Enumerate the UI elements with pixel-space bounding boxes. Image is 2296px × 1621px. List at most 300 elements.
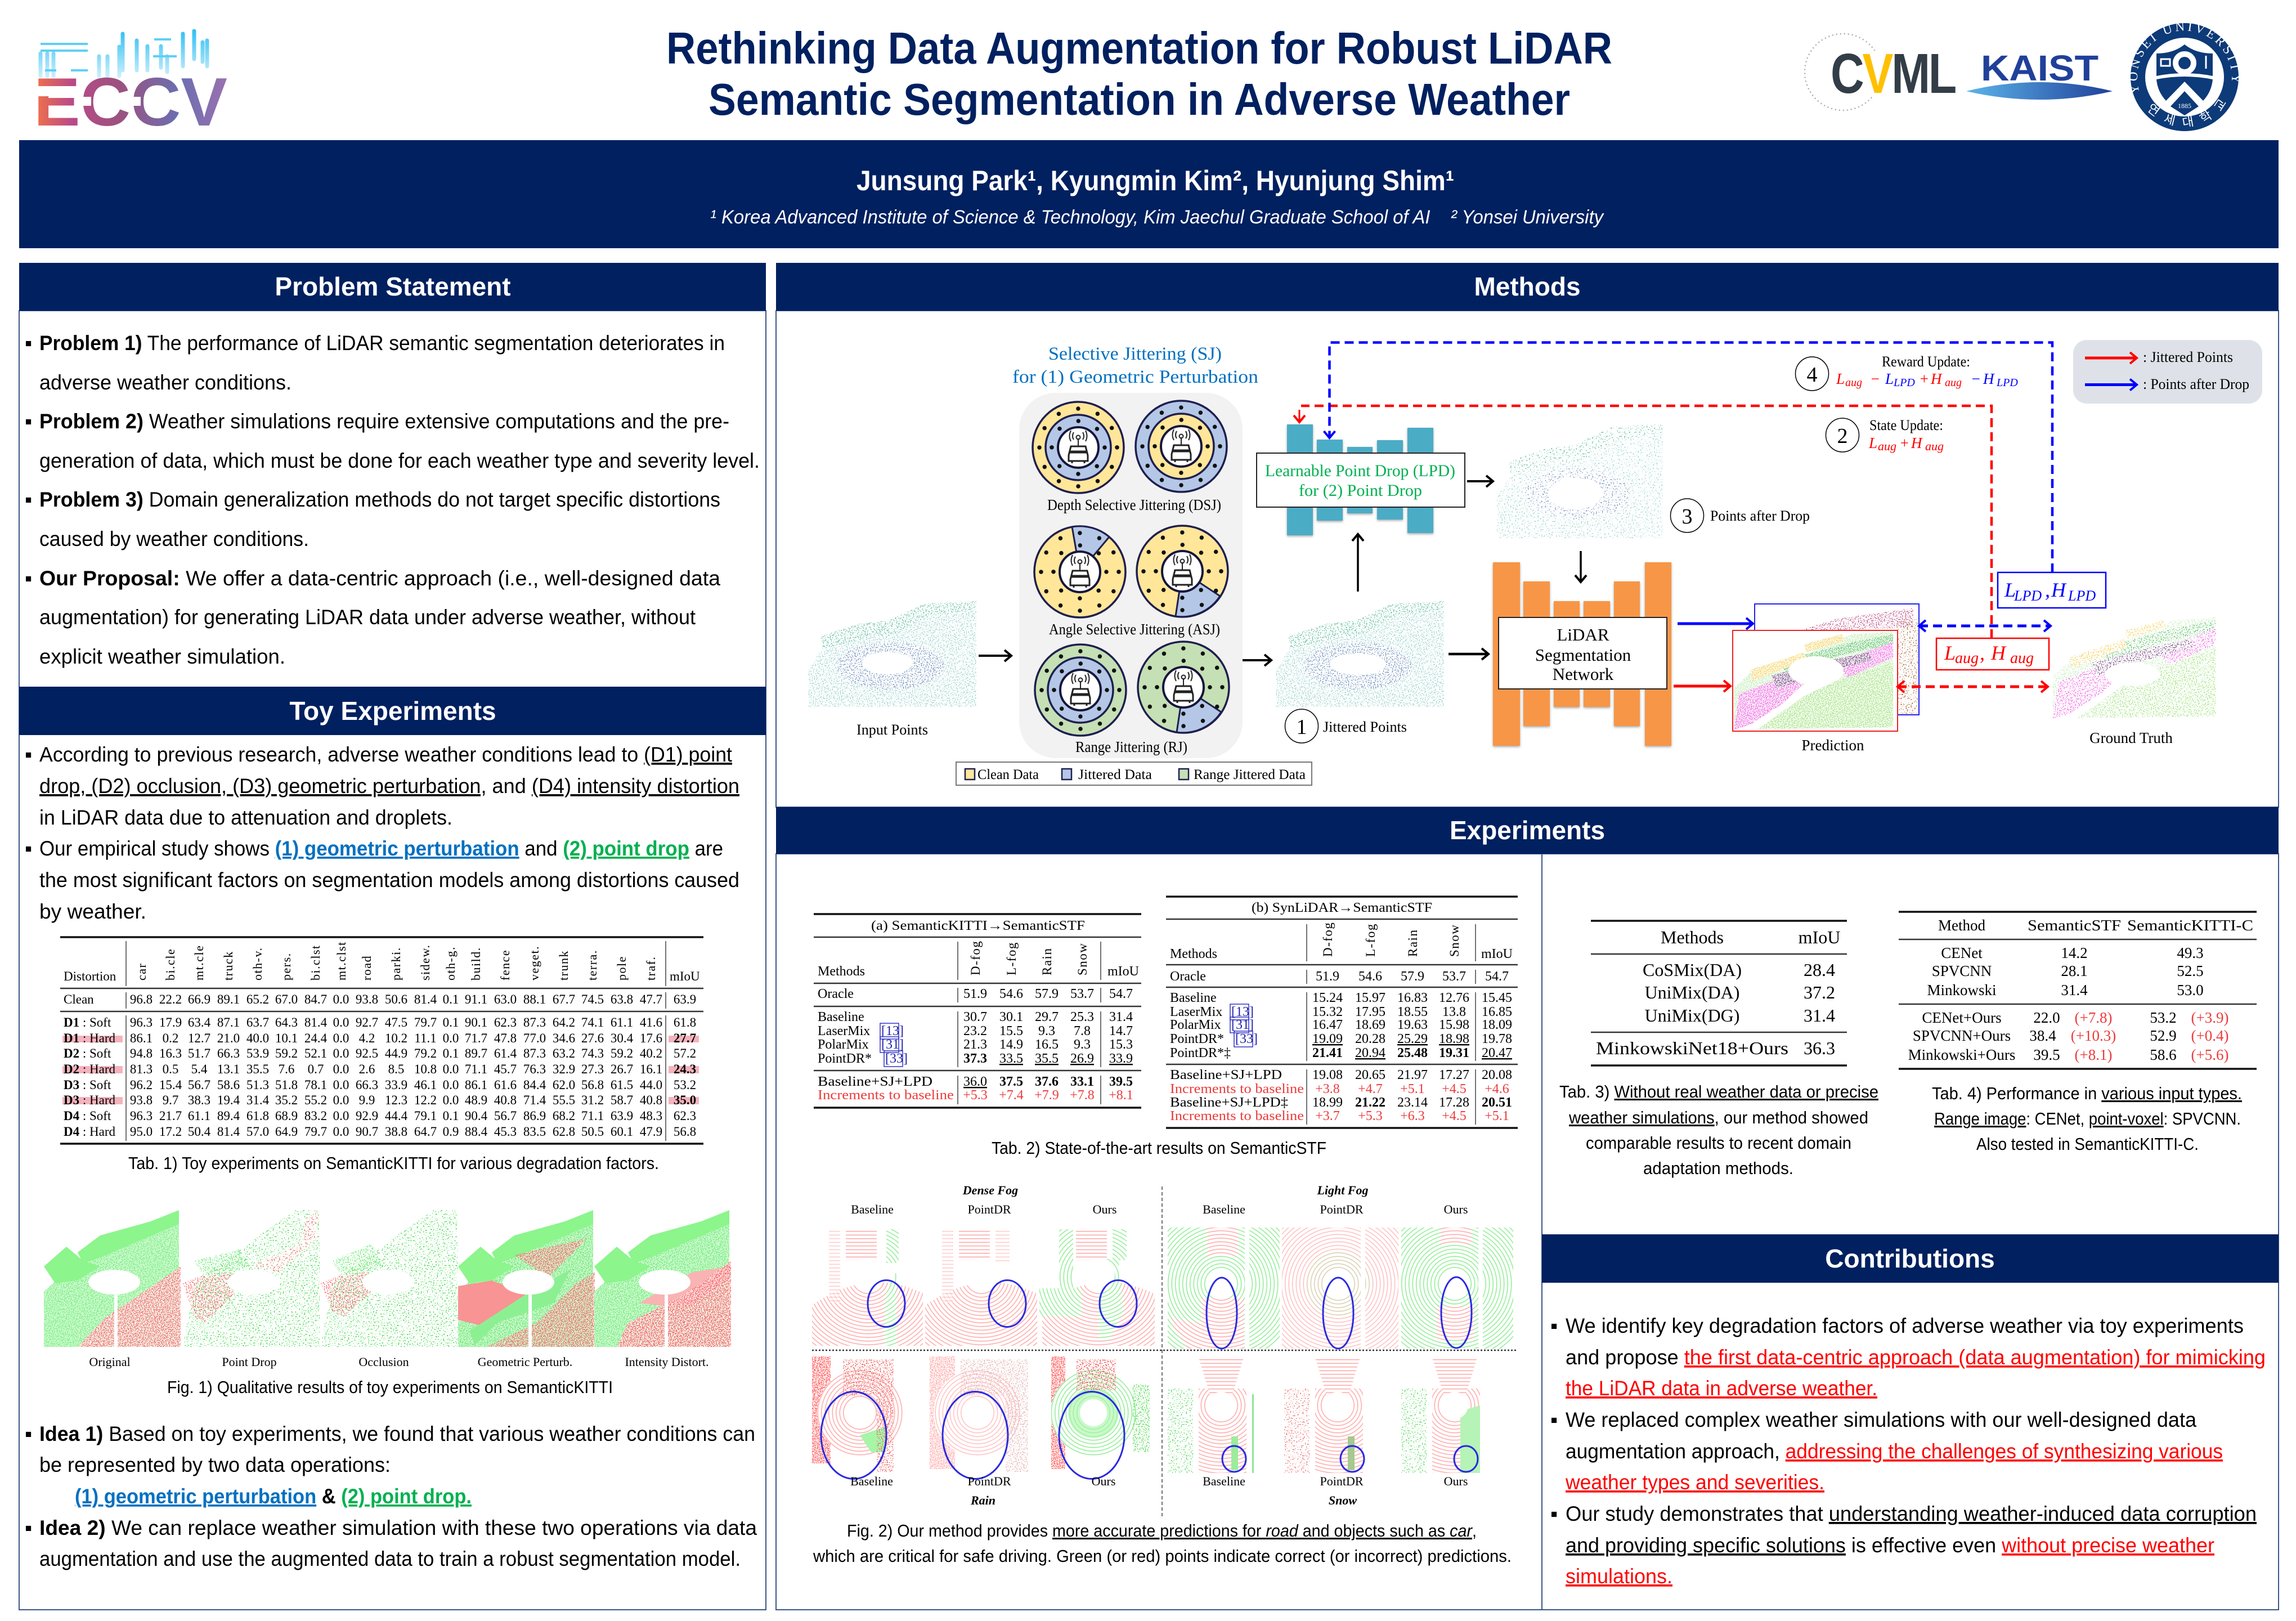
table 1: toy experiments: 96.8	[130, 992, 153, 1006]
labels: top row: Ours	[1444, 1202, 1468, 1216]
table 2b: SynLiDAR to SemanticSTF: Increments to baseline	[1170, 1109, 1304, 1123]
heading: Experiments: Experiments	[1450, 816, 1605, 845]
table 2b: SynLiDAR to SemanticSTF: Baseline+SJ+LPD‡	[1170, 1095, 1288, 1110]
labels: top row: Baseline	[851, 1202, 894, 1216]
author band	[19, 140, 2279, 248]
text block: contributions: and providing specific solutions is effective even without precise weather	[1566, 1534, 2214, 1557]
image: light fog baseline	[1168, 1228, 1280, 1349]
heading: Toy Experiments: Toy Experiments	[289, 696, 496, 726]
table 1: toy experiments: Clean	[64, 992, 94, 1006]
table 2a: SemanticKITTI to SemanticSTF: +8.1	[1109, 1088, 1133, 1103]
table 2a: SemanticKITTI to SemanticSTF: Oracle	[818, 987, 854, 1001]
image labels: Point Drop	[222, 1355, 277, 1369]
block: LiDAR segmentation network	[1493, 562, 1671, 746]
text block: problems: Problem 1) The performance of LiDAR semantic segmentation deteriorates in	[39, 332, 725, 355]
image: ground truth	[2053, 617, 2216, 746]
annotation: state update: aug	[1878, 439, 1896, 453]
annotation: reward update: aug	[1945, 377, 1962, 389]
caption: table 1: Tab. 1) Toy experiments on SemanticKITTI for various degradation factors.	[128, 1153, 659, 1173]
table 1: toy experiments: 0.0	[443, 1031, 459, 1045]
text: selective jittering title: for (1) Geometric Perturbation	[1012, 367, 1258, 387]
table 2a: SemanticKITTI to SemanticSTF: 25.3	[1070, 1010, 1094, 1024]
table 1: toy experiments: 58.7	[611, 1093, 633, 1107]
table 2b: SynLiDAR to SemanticSTF: 19.09	[1312, 1032, 1343, 1046]
block: learnable point drop: for (2) Point Drop	[1299, 481, 1422, 500]
image: jittered points: 1	[1297, 715, 1307, 739]
table 4: input types: Method	[1938, 917, 1985, 934]
table 2a: SemanticKITTI to SemanticSTF: +5.3	[963, 1088, 988, 1103]
image: rain baseline	[812, 1356, 903, 1472]
table 1: toy experiments: 9.7	[163, 1093, 178, 1107]
table 2b: SynLiDAR to SemanticSTF: PointDR*	[1170, 1032, 1224, 1046]
logo: KAIST: KAIST	[1981, 48, 2098, 88]
figure 2: qualitative comparison	[812, 1183, 1536, 1517]
image: light fog ours	[1401, 1228, 1513, 1349]
table 1: toy experiments: 27.6	[581, 1031, 604, 1045]
image: dense fog ours	[1039, 1229, 1155, 1346]
table 2b: SynLiDAR to SemanticSTF: 18.09	[1482, 1018, 1512, 1032]
table 1: toy experiments: 84.4	[523, 1078, 546, 1092]
table 1: toy experiments: 63.9	[674, 992, 696, 1006]
table 1: toy experiments: 89.1	[217, 992, 240, 1006]
annotation: state update	[1826, 417, 1944, 453]
table 1: toy experiments: 0.0	[333, 1109, 349, 1123]
table 4: input types: CENet+Ours	[1922, 1009, 2002, 1026]
table 1: toy experiments: 56.8	[581, 1078, 604, 1092]
table 3: domain adaptation comparison: UniMix(DG)	[1645, 1005, 1739, 1026]
table 1: toy experiments: 0.0	[333, 1093, 349, 1107]
table 1: toy experiments: 0.0	[333, 992, 349, 1006]
labels: top row	[851, 1183, 1468, 1216]
caption: table 4: Also tested in SemanticKITTI-C.	[1976, 1134, 2199, 1154]
table 1: toy experiments: 0.1	[443, 1046, 459, 1060]
label: ASJ: Angle Selective Jittering (ASJ)	[1049, 621, 1220, 638]
table 2a: SemanticKITTI to SemanticSTF: L-fog	[1004, 942, 1019, 975]
table 1: toy experiments: 57.0	[246, 1125, 269, 1139]
image: intensity distortion	[594, 1210, 731, 1347]
caption: table 4: Range image: CENet, point-voxel: SPVCNN.	[1934, 1109, 2241, 1129]
table 1: toy experiments: 63.8	[611, 992, 633, 1006]
table 1: toy experiments: 87.3	[523, 1046, 546, 1060]
image: snow PointDR	[1284, 1359, 1363, 1473]
text block: problems: explicit weather simulation.	[39, 645, 285, 668]
table 2a: SemanticKITTI to SemanticSTF: Baseline	[818, 1010, 864, 1024]
image: prediction	[1733, 604, 1919, 754]
table 1: toy experiments: trunk	[557, 950, 571, 980]
table 1: toy experiments: 81.4	[217, 1125, 240, 1139]
table 3: domain adaptation comparison: 28.4	[1804, 960, 1835, 980]
arrow: dashed red state update	[1301, 406, 1992, 638]
table 4: input types: 58.6	[2150, 1046, 2177, 1063]
labels: top row: Baseline	[1203, 1202, 1245, 1216]
table 4: input types: 53.2	[2150, 1009, 2177, 1026]
table 1: toy experiments: 24.3	[674, 1062, 696, 1076]
text block: ideas: ▪	[25, 1516, 32, 1539]
table 1: toy experiments: 34.6	[553, 1031, 575, 1045]
text block: problems: caused by weather conditions.	[39, 527, 309, 550]
table 1: toy experiments: 44.0	[640, 1078, 662, 1092]
table 1: toy experiments: 81.4	[304, 1015, 328, 1029]
annotation: state update: +	[1899, 435, 1909, 451]
table 2a: SemanticKITTI to SemanticSTF: 39.5	[1109, 1074, 1133, 1089]
arrow: network to red prediction	[1674, 684, 1730, 688]
table 2b: SynLiDAR to SemanticSTF: L-fog	[1364, 923, 1378, 957]
caption: table 3: comparable results to recent domain	[1586, 1133, 1851, 1153]
text block: contributions: We identify key degradation factors of adverse weather via toy experiments	[1566, 1314, 2244, 1337]
caption: table 4: Tab. 4) Performance in various input types.	[1932, 1083, 2242, 1103]
table 1: toy experiments: 17.2	[159, 1125, 182, 1139]
annotation: reward update: Reward Update:	[1882, 353, 1970, 370]
table 1: toy experiments: 31.2	[581, 1093, 604, 1107]
table 1: toy experiments: 68.2	[553, 1109, 575, 1123]
table 2a: SemanticKITTI to SemanticSTF: Rain	[1040, 948, 1054, 975]
logo: CVML	[1805, 34, 1958, 110]
table 1: toy experiments: 53.9	[246, 1046, 269, 1060]
table 2b: SynLiDAR to SemanticSTF: D-fog	[1321, 922, 1335, 957]
table 2b: SynLiDAR to SemanticSTF: Baseline+SJ+LPD	[1170, 1068, 1282, 1082]
table 4: input types: 52.9	[2150, 1027, 2177, 1044]
panel: selective jittering	[1019, 393, 1243, 758]
text block: problems: Problem 3) Domain generalization methods do not target specific distortions	[39, 488, 720, 511]
image: points after drop: Points after Drop	[1710, 508, 1810, 524]
box: augmentation loss: L	[1944, 642, 1956, 664]
table 1: toy experiments: 2.6	[359, 1062, 375, 1076]
table 1: toy experiments: 71.4	[523, 1093, 546, 1107]
table 1: toy experiments: 50.5	[581, 1125, 604, 1139]
table 1: toy experiments: terra.	[585, 950, 599, 980]
logo: Yonsei University	[2131, 23, 2239, 131]
labels: top row: Dense Fog	[962, 1183, 1018, 1197]
table 4: input types: SPVCNN	[1932, 962, 1992, 979]
heading: Experiments	[776, 807, 2279, 854]
annotation: reward update	[1795, 353, 2018, 391]
table 1: toy experiments: 81.4	[414, 992, 437, 1006]
table 1: toy experiments: 21.0	[217, 1031, 240, 1045]
table 1: toy experiments: 93.8	[130, 1093, 153, 1107]
table 4: input types: CENet	[1941, 944, 1983, 961]
table 1: toy experiments: 53.2	[674, 1078, 696, 1092]
table 1: toy experiments: 7.6	[279, 1062, 294, 1076]
caption: table 3	[1559, 1082, 1878, 1178]
annotation: state update: H	[1911, 435, 1923, 451]
table 1: toy experiments: build.	[469, 947, 483, 980]
annotation: reward update: 4	[1806, 363, 1818, 387]
table 2b: SynLiDAR to SemanticSTF: +6.3	[1400, 1109, 1425, 1123]
title: Semantic Segmentation in Adverse Weather	[708, 74, 1570, 124]
table 1: toy experiments: 0.1	[443, 1109, 459, 1123]
table 2b: SynLiDAR to SemanticSTF: 18.98	[1439, 1032, 1469, 1046]
table 1: toy experiments: 48.9	[465, 1093, 487, 1107]
table 1: toy experiments: 40.8	[640, 1093, 662, 1107]
table 1: toy experiments: 63.0	[494, 992, 517, 1006]
caption: table 3: Tab. 3) Without real weather data or precise	[1559, 1082, 1878, 1101]
table 2b: SynLiDAR to SemanticSTF: 12.76	[1439, 991, 1469, 1005]
labels: top row: Ours	[1093, 1202, 1116, 1216]
table 4: input types: (+5.6)	[2191, 1046, 2228, 1063]
table 1: toy experiments: 61.4	[494, 1046, 517, 1060]
block: LiDAR segmentation network: Network	[1553, 664, 1614, 684]
labels: bottom row: Baseline	[850, 1474, 893, 1488]
table 1: toy experiments: 56.8	[674, 1125, 696, 1139]
image: prediction: Prediction	[1802, 737, 1864, 754]
table 2b: SynLiDAR to SemanticSTF: +5.3	[1358, 1109, 1383, 1123]
table 2a: SemanticKITTI to SemanticSTF: 23.2	[963, 1024, 987, 1038]
table 1: toy experiments: 47.7	[640, 992, 662, 1006]
table 2b: SynLiDAR to SemanticSTF: 20.28	[1355, 1032, 1385, 1046]
affiliations: ¹ Korea Advanced Institute of Science & Technology, Kim Jaechul Graduate School of AI ² Yonsei University	[710, 207, 1604, 228]
table 2a: SemanticKITTI to SemanticSTF: 57.9	[1035, 987, 1059, 1001]
table 1: toy experiments: mt.clst	[334, 941, 348, 980]
table 1: toy experiments: 0.1	[443, 1015, 459, 1029]
table 2a: SemanticKITTI to SemanticSTF: (a) SemanticKITTI→SemanticSTF	[871, 919, 1085, 933]
table 1: toy experiments: 60.1	[611, 1125, 633, 1139]
table 2a: SemanticKITTI to SemanticSTF: 54.6	[999, 987, 1023, 1001]
table 2a: SemanticKITTI to SemanticSTF: 31.4	[1109, 1010, 1133, 1024]
table 1: toy experiments: 0.9	[443, 1125, 459, 1139]
legend: data types: Clean Data	[977, 767, 1039, 782]
text block: contributions: ▪	[1550, 1408, 1558, 1431]
table 2a: SemanticKITTI to SemanticSTF: 54.7	[1109, 987, 1133, 1001]
table 1: toy experiments: D3 : Soft	[64, 1078, 111, 1092]
table 2b: SynLiDAR to SemanticSTF: mIoU	[1481, 947, 1513, 961]
table 1: toy experiments: 66.3	[356, 1078, 378, 1092]
table 2a: SemanticKITTI to SemanticSTF: 29.7	[1035, 1010, 1059, 1024]
table 2a: SemanticKITTI to SemanticSTF: 33.9	[1109, 1051, 1133, 1066]
table 2b: SynLiDAR to SemanticSTF: 25.29	[1397, 1032, 1428, 1046]
table 1: toy experiments: 47.9	[640, 1125, 662, 1139]
image: snow ours	[1401, 1359, 1480, 1473]
table 1: toy experiments: 17.6	[640, 1031, 662, 1045]
table 2a: SemanticKITTI to SemanticSTF: 30.7	[963, 1010, 987, 1024]
table 2b: SynLiDAR to SemanticSTF: Baseline	[1170, 991, 1217, 1005]
table 2b: SynLiDAR to SemanticSTF: 19.08	[1312, 1068, 1343, 1082]
table 1: toy experiments: 76.3	[523, 1062, 546, 1076]
highlight ellipses	[821, 1277, 1478, 1479]
table 1: toy experiments: 12.7	[188, 1031, 210, 1045]
text block: toy experiments: ▪	[25, 837, 32, 860]
table 2a: SemanticKITTI to SemanticSTF: 16.5	[1035, 1037, 1059, 1052]
table 4: input types: (+0.4)	[2191, 1027, 2228, 1044]
table 1: toy experiments: 10.2	[385, 1031, 407, 1045]
table 1: toy experiments: 13.1	[217, 1062, 240, 1076]
table 1: toy experiments: 56.7	[494, 1109, 517, 1123]
table 2b: SynLiDAR to SemanticSTF: 57.9	[1401, 969, 1424, 984]
legend: data types: Range Jittered Data	[1194, 767, 1306, 782]
table 2a: SemanticKITTI to SemanticSTF: D-fog	[968, 941, 983, 975]
image: occlusion	[321, 1210, 458, 1347]
table 2b: SynLiDAR to SemanticSTF: Increments to baseline	[1170, 1082, 1304, 1096]
table 1: toy experiments: 62.3	[494, 1015, 517, 1029]
legend: data types: Jittered Data	[1078, 767, 1152, 782]
table 1: toy experiments: truck	[221, 951, 235, 980]
table 2b: SynLiDAR to SemanticSTF: Rain	[1406, 929, 1420, 957]
table 1: toy experiments: 84.7	[304, 992, 327, 1006]
table 1: toy experiments: 44.9	[385, 1046, 407, 1060]
table 2b: SynLiDAR to SemanticSTF: 20.51	[1482, 1095, 1512, 1110]
text block: ideas: ▪	[25, 1422, 32, 1445]
table 1: toy experiments: D4 : Hard	[64, 1125, 115, 1139]
table 4: input types: 28.1	[2061, 962, 2088, 979]
table 2a: SemanticKITTI to SemanticSTF: 14.7	[1109, 1024, 1133, 1038]
table 1: toy experiments: 0.2	[163, 1031, 178, 1045]
table 1: toy experiments: 46.1	[414, 1078, 437, 1092]
heading: Contributions: Contributions	[1825, 1244, 1995, 1273]
image: light fog PointDR	[1282, 1228, 1398, 1349]
panel: methods	[776, 263, 2279, 807]
table 1: toy experiments: Distortion	[64, 969, 116, 983]
table 1: toy experiments: 47.5	[385, 1015, 407, 1029]
table 2a: SemanticKITTI to SemanticSTF: 15.3	[1109, 1037, 1133, 1052]
table 2a: SemanticKITTI to SemanticSTF: 35.5	[1035, 1051, 1059, 1066]
table 2b: SynLiDAR to SemanticSTF: (b) SynLiDAR→SemanticSTF	[1252, 901, 1432, 915]
table 2b: SynLiDAR to SemanticSTF: 23.14	[1397, 1095, 1428, 1110]
table 1: toy experiments: 10.1	[275, 1031, 298, 1045]
annotation: reward update: −	[1971, 370, 1981, 387]
text block: problems: augmentation) for generating LiDAR data under adverse weather, without	[39, 606, 696, 629]
table 1: toy experiments: 93.8	[356, 992, 378, 1006]
heading: Problem Statement	[19, 263, 766, 311]
table 2b: SynLiDAR to SemanticSTF: LaserMix	[1170, 1005, 1222, 1019]
table 1: toy experiments: 26.7	[611, 1062, 633, 1076]
table 1: toy experiments: 27.3	[581, 1062, 604, 1076]
table 2b: SynLiDAR to SemanticSTF: 15.98	[1439, 1018, 1469, 1032]
table 1: toy experiments: 78.1	[304, 1078, 327, 1092]
table 1: toy experiments: 55.5	[553, 1093, 575, 1107]
table 1: toy experiments: D1 : Soft	[64, 1015, 111, 1029]
labels: bottom row: Baseline	[1203, 1474, 1245, 1488]
table 2b: SynLiDAR to SemanticSTF: 15.32	[1312, 1005, 1343, 1019]
table 1: toy experiments: fence	[498, 950, 512, 980]
arrow: blue double dashed	[1919, 625, 2051, 627]
image: dense fog baseline	[812, 1229, 923, 1346]
table 1: toy experiments: 33.9	[385, 1078, 407, 1092]
table 1: toy experiments: D4 : Soft	[64, 1109, 111, 1123]
image labels: Geometric Perturb.	[478, 1355, 572, 1369]
table 1: toy experiments: 16.3	[159, 1046, 182, 1060]
table 1: toy experiments: 21.7	[159, 1109, 182, 1123]
table 2a: SemanticKITTI to SemanticSTF: 30.1	[999, 1010, 1023, 1024]
table 2a: SemanticKITTI to SemanticSTF: +7.4	[999, 1088, 1024, 1103]
table 2a: SemanticKITTI to SemanticSTF: Methods	[818, 964, 865, 979]
table 1: toy experiments: 65.2	[246, 992, 269, 1006]
table 2a: SemanticKITTI to SemanticSTF: 9.3	[1074, 1037, 1091, 1052]
table 4: input types: 22.0	[2033, 1009, 2060, 1026]
text block: toy experiments: in LiDAR data due to attenuation and droplets.	[39, 806, 452, 829]
table 1: toy experiments: 96.3	[130, 1015, 153, 1029]
image labels: Occlusion	[358, 1355, 409, 1369]
table 1: toy experiments: 79.1	[414, 1109, 437, 1123]
image labels: Intensity Distort.	[625, 1355, 709, 1369]
table 2b: SynLiDAR to SemanticSTF: 21.41	[1312, 1046, 1343, 1060]
table 1: toy experiments: 40.8	[494, 1093, 517, 1107]
table 4: input types: SPVCNN+Ours	[1913, 1027, 2011, 1044]
table 1: toy experiments: 64.9	[275, 1125, 298, 1139]
block: LiDAR segmentation network: LiDAR	[1557, 625, 1609, 644]
table 2a: SemanticKITTI to SemanticSTF: PolarMix	[818, 1037, 869, 1052]
arrow: jittered to LPD	[1357, 534, 1359, 592]
table 2a: SemanticKITTI to SemanticSTF: [33]	[885, 1051, 908, 1066]
box: augmentation loss: aug	[1955, 650, 1979, 667]
panel: experiments	[776, 807, 2279, 1610]
table 4: input types: 53.0	[2177, 982, 2204, 998]
table 1: toy experiments: 40.0	[246, 1031, 269, 1045]
table 1: toy experiments: 71.1	[465, 1062, 487, 1076]
table 1: toy experiments	[60, 937, 703, 1144]
labels: bottom row: Ours	[1092, 1474, 1115, 1488]
table 2b: SynLiDAR to SemanticSTF: Methods	[1170, 947, 1217, 961]
table 4: input types: 14.2	[2061, 944, 2088, 961]
table 4: input types: 38.4	[2029, 1027, 2056, 1044]
table 2a: SemanticKITTI to SemanticSTF: LaserMix	[818, 1024, 870, 1038]
box: augmentation loss: aug	[2010, 650, 2034, 667]
table 2a: SemanticKITTI to SemanticSTF: 33.5	[999, 1051, 1023, 1066]
table 1: toy experiments: 19.4	[217, 1093, 240, 1107]
title: Rethinking Data Augmentation for Robust LiDAR	[666, 23, 1612, 73]
arrow: dashed blue reward update	[1329, 342, 2052, 572]
table 3: domain adaptation comparison: 37.2	[1804, 982, 1835, 1002]
labels: bottom row	[850, 1474, 1468, 1507]
table 1: toy experiments: 62.0	[553, 1078, 575, 1092]
table 2a: SemanticKITTI to SemanticSTF: 15.5	[999, 1024, 1023, 1038]
table 1: toy experiments: oth-g.	[443, 946, 458, 980]
annotation: reward update: LPD	[1893, 377, 1915, 389]
table 2a: SemanticKITTI to SemanticSTF: +7.8	[1070, 1088, 1095, 1103]
text block: problems: ▪	[25, 488, 32, 511]
box: LPD loss: LPD	[2068, 588, 2096, 604]
table 2b: SynLiDAR to SemanticSTF: 16.83	[1397, 991, 1428, 1005]
table 2a: SemanticKITTI to SemanticSTF: PointDR*	[818, 1051, 872, 1066]
table 1: toy experiments: 88.4	[465, 1125, 488, 1139]
table 2b: SynLiDAR to SemanticSTF: 54.6	[1358, 969, 1382, 984]
caption: figure 2: which are critical for safe driving. Green (or red) points indicate correct (or incorrect) predictions.	[813, 1546, 1512, 1566]
table 1: toy experiments: 0.0	[333, 1125, 349, 1139]
table 2a: SemanticKITTI to SemanticSTF: 36.0	[963, 1074, 987, 1089]
table 1: toy experiments: 31.4	[246, 1093, 270, 1107]
title	[666, 23, 1612, 124]
annotation: reward update: aug	[1845, 377, 1862, 389]
table 1: toy experiments: 63.4	[188, 1015, 211, 1029]
table 1: toy experiments: 35.5	[246, 1062, 269, 1076]
table 1: toy experiments: 12.2	[414, 1093, 437, 1107]
table 2a: SemanticKITTI to SemanticSTF: 14.9	[999, 1037, 1023, 1052]
table 4: input types: 31.4	[2061, 982, 2088, 998]
caption: figure 2	[813, 1521, 1512, 1566]
table 2b: SynLiDAR to SemanticSTF: 18.99	[1312, 1095, 1343, 1110]
annotation: reward update: −	[1870, 370, 1880, 387]
table 1: toy experiments: 52.1	[304, 1046, 327, 1060]
icon: angle selective jittering B	[1137, 526, 1228, 617]
table 2a: SemanticKITTI to SemanticSTF: 33.1	[1070, 1074, 1094, 1089]
text block: contributions	[1550, 1314, 2266, 1588]
labels: bottom row: PointDR	[967, 1474, 1011, 1488]
table 3: domain adaptation comparison: MinkowskiNet18+Ours	[1596, 1038, 1788, 1058]
table 1: toy experiments: 59.2	[611, 1046, 633, 1060]
text block: problems	[25, 332, 760, 668]
table 3: domain adaptation comparison: 31.4	[1804, 1005, 1835, 1026]
table 2b: SynLiDAR to SemanticSTF: Snow	[1447, 924, 1461, 957]
table 2b: SynLiDAR to SemanticSTF: +4.6	[1485, 1082, 1509, 1096]
table 2a: SemanticKITTI to SemanticSTF: 53.7	[1070, 987, 1094, 1001]
table 4: input types: SemanticSTF	[2028, 917, 2121, 934]
legend: arrows: : Points after Drop	[2143, 376, 2249, 392]
text block: toy experiments: Our empirical study shows (1) geometric perturbation and (2) point drop are	[39, 837, 723, 860]
table 1: toy experiments: pole	[615, 956, 629, 980]
table 1: toy experiments: 4.2	[359, 1031, 375, 1045]
table 1: toy experiments: 35.2	[275, 1093, 298, 1107]
table 1: toy experiments: traf.	[644, 956, 658, 980]
table 1: toy experiments: 90.1	[465, 1015, 487, 1029]
table 2b: SynLiDAR to SemanticSTF: PolarMix	[1170, 1018, 1221, 1032]
